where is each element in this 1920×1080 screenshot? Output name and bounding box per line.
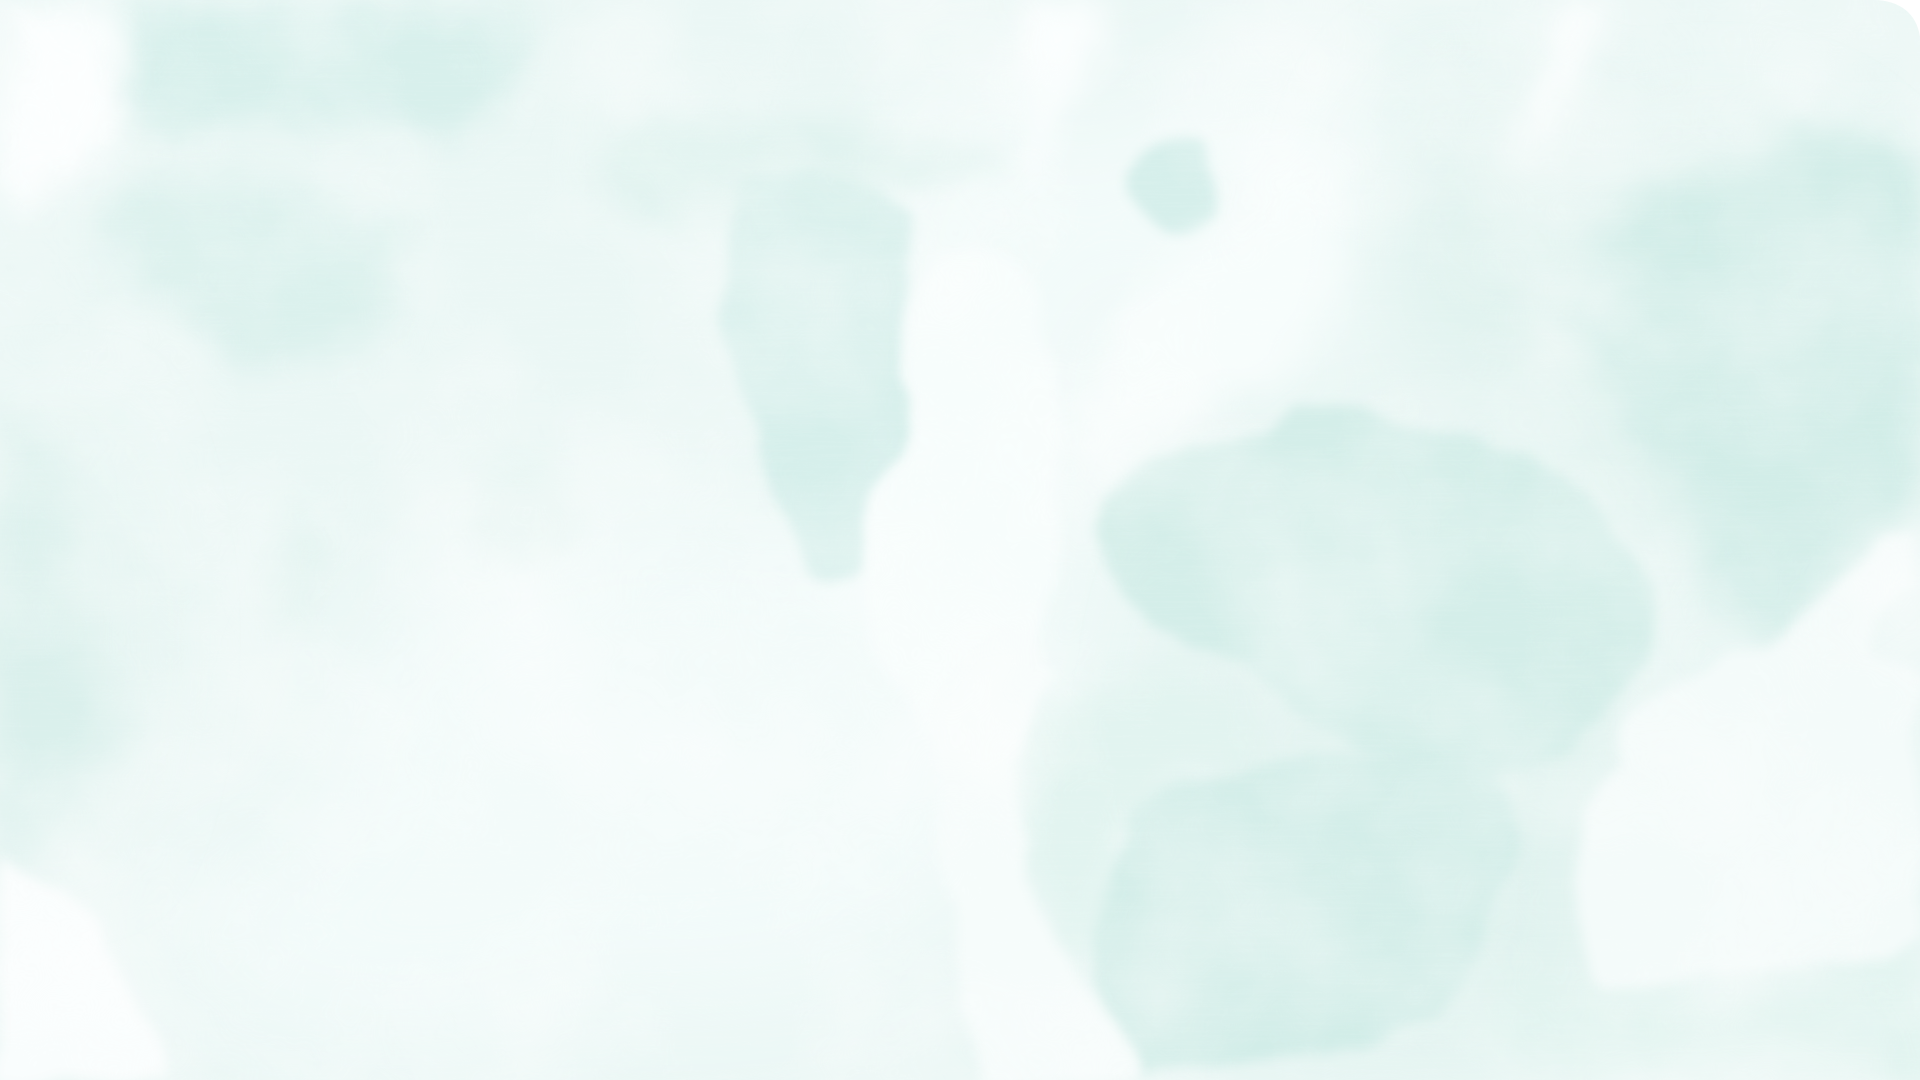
white patch: lower right: [1577, 533, 1920, 983]
white patch: centre vertical streak: [862, 249, 1062, 759]
stain: bottom right: [1445, 943, 1920, 1080]
stain: centre drip: [723, 169, 918, 587]
stain: lower right: [1095, 747, 1518, 1080]
stain: left edge: [0, 404, 117, 863]
stain: lower right edge: [1016, 665, 1251, 967]
stain: upper left: [100, 180, 411, 362]
light washes: [171, 61, 1457, 1041]
white patch: top right streak: [1524, 0, 1610, 159]
rounded corner: top right: [1873, 0, 1920, 37]
white patch: top centre streak: [1016, 0, 1108, 188]
white patch: upper centre right streak: [1095, 142, 1342, 490]
white patch: centre bottom wedge: [929, 637, 1141, 1080]
stain: right upper: [1564, 117, 1920, 631]
white patch: top left corner: [0, 0, 127, 208]
stain: top left: [108, 0, 521, 142]
stain: left centre faint: [255, 456, 576, 630]
stain: small top centre: [1127, 135, 1215, 233]
stain: right centre: [1096, 404, 1655, 784]
white patch: bottom left corner: [0, 857, 165, 1080]
stain: upper centre: [588, 118, 1016, 222]
